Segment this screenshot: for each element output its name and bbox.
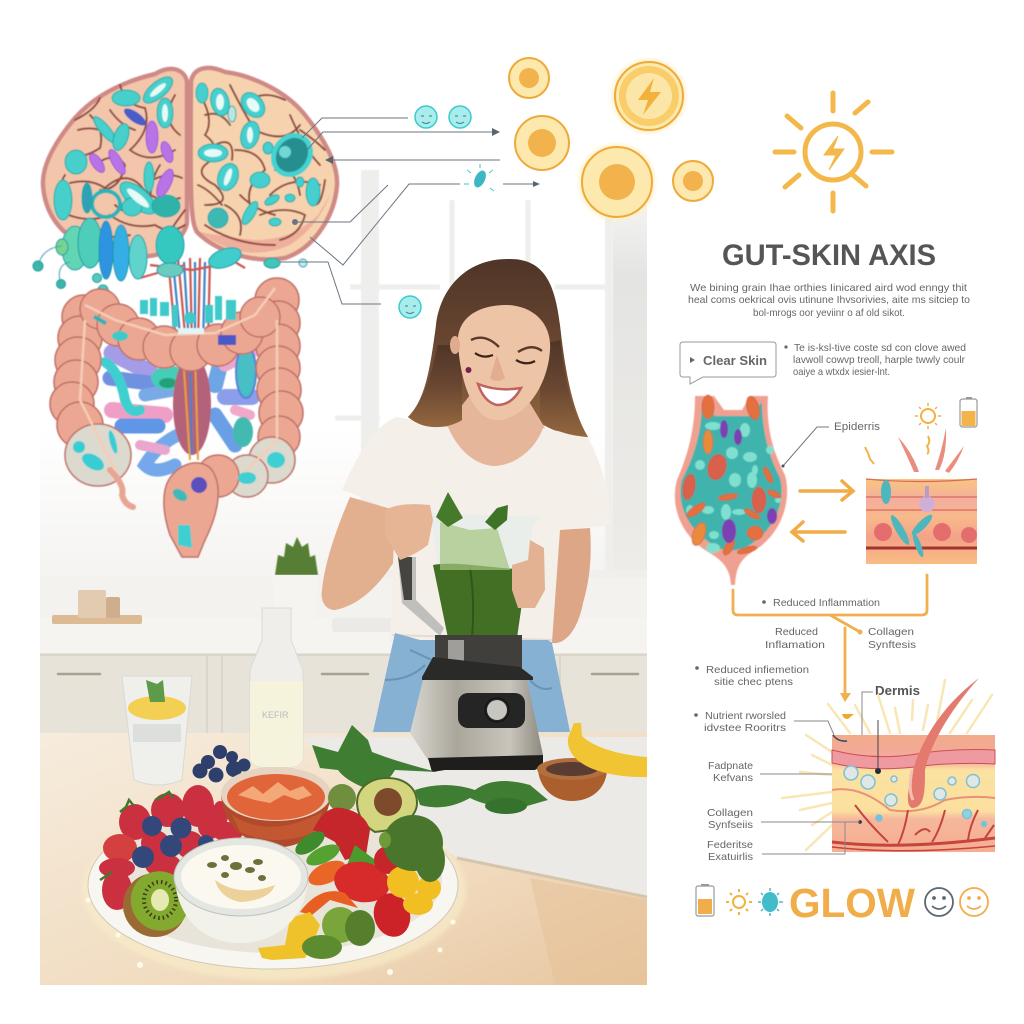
brain with microbes [33, 68, 337, 345]
exchange arrows [792, 481, 853, 541]
caecum microbes [73, 430, 119, 474]
bottom battery icon [696, 884, 714, 916]
left side bullets: sitie chec ptens [714, 676, 793, 688]
small broccoli behind [328, 784, 356, 812]
energy coins [509, 58, 713, 220]
dermis heading: Dermis [875, 684, 920, 698]
left side bullets: Exatuirlis [708, 851, 753, 863]
orange connector [733, 575, 927, 695]
wooden bowl of seeds [537, 758, 607, 801]
blueberries [132, 816, 214, 868]
left side bullets: Federitse [707, 839, 753, 851]
callout description: lavwoll cowvp treoll, harple twwly coulr [793, 354, 965, 366]
yogurt bowl [174, 838, 308, 943]
large sun icon [775, 93, 892, 211]
blender jug [430, 513, 540, 637]
arrowheads [325, 128, 568, 187]
small intestines [105, 350, 255, 470]
neck [445, 395, 545, 480]
lightning bolt [638, 78, 661, 115]
shirt [342, 417, 612, 642]
yellow tomatoes [387, 866, 441, 915]
reduced inflammation labels: Collagen [868, 626, 914, 638]
epiderris label [782, 421, 881, 468]
microbes right [196, 83, 320, 228]
glowing rays around skin [782, 680, 992, 850]
left side bullets: idvstee Rooritrs [704, 722, 786, 734]
left side bullets: Synfseiis [708, 819, 753, 831]
milk bottle kefir: KEFIR [262, 710, 289, 720]
kiwi [120, 861, 200, 941]
reduced inflammation labels: Reduced Inflammation [773, 597, 880, 609]
callout description [784, 342, 966, 378]
spinach leaves [312, 725, 548, 814]
brain folds [58, 85, 325, 245]
plant [272, 537, 318, 620]
vessels [832, 805, 995, 851]
left side bullets: Nutrient rworsled [705, 710, 786, 722]
intro paragraph: heal coms oekrical ovis utinune Ihvsorivies, aite ms sitciep to [688, 294, 970, 306]
left side bullets: Collagen [707, 807, 753, 819]
kitchen photo background [40, 170, 647, 985]
hemisphere left [43, 69, 187, 256]
epiderris label: Epiderris [834, 421, 881, 433]
reduced inflammation labels: Reduced [775, 626, 818, 638]
microbe cluster [33, 218, 307, 295]
broccoli [302, 815, 445, 959]
hair locks [408, 345, 462, 427]
table top [40, 733, 647, 985]
jeans [373, 633, 570, 732]
smiley grey [925, 888, 953, 916]
ascending colon [50, 295, 131, 486]
hair back [408, 259, 588, 437]
banana [568, 723, 647, 777]
intro paragraph [688, 282, 970, 319]
clear skin callout [680, 342, 776, 384]
reduced inflammation labels [762, 597, 916, 651]
blender collar [435, 635, 522, 668]
backsplash and worktop [40, 578, 647, 620]
annotation lines [280, 118, 534, 304]
hands on jug [385, 504, 433, 560]
callout description: oaiye a wtxdx iesier-lnt. [793, 366, 890, 378]
plate [82, 800, 466, 980]
bell peppers [291, 808, 415, 941]
glow word: GLOW [789, 880, 915, 926]
dermis leader lines [760, 692, 878, 854]
hemisphere right [191, 68, 337, 259]
teal face microbes [399, 106, 494, 318]
intro paragraph: We bining grain Ihae orthies Iinicared aird wod enngy thit [690, 282, 967, 294]
milk bottle kefir [250, 608, 303, 767]
gut-brain vessels [140, 258, 245, 345]
sun rays and battery top [865, 397, 977, 473]
coin halo [579, 59, 686, 220]
eyes brows mouth [471, 338, 542, 352]
reduced inflammation labels: Synftesis [868, 639, 916, 651]
face [458, 305, 550, 420]
hair follicle [908, 678, 979, 808]
left side bullets: Reduced infiemetion [706, 664, 809, 676]
avocado [357, 778, 417, 832]
woman blending smoothie [322, 259, 612, 772]
yellow pepper strips [258, 912, 320, 960]
window [335, 170, 647, 584]
smiley orange [960, 888, 988, 916]
marble slab [300, 737, 647, 897]
large dark microbe [262, 125, 322, 185]
counter items [52, 615, 142, 624]
blueberries on counter [192, 745, 250, 782]
microbes left [54, 72, 180, 220]
glass of lemon water [122, 676, 192, 785]
transverse colon [80, 289, 280, 371]
intro paragraph: bol-mrogs oor yeviinr o af old sikot. [753, 307, 905, 319]
descending colon [164, 278, 303, 557]
skin cross-section dermis [832, 678, 995, 852]
sparkles [86, 898, 456, 975]
sigmoid rectum [164, 463, 218, 557]
arm right [522, 528, 591, 643]
kimchi bowl [221, 767, 331, 847]
left side bullets: Kefvans [713, 772, 753, 784]
bottom sun icon [726, 889, 752, 915]
bacteria [686, 422, 781, 553]
left side bullets [694, 664, 809, 863]
arm left [322, 497, 397, 610]
colon and intestines [50, 278, 303, 557]
reduced inflammation labels: Inflamation [765, 639, 825, 651]
callout description: Te is-ksl-tive coste sd con clove awed [794, 342, 966, 354]
skin cross-section top [866, 479, 977, 564]
clear skin callout: Clear Skin [703, 353, 767, 368]
left side bullets: Fadpnate [708, 760, 753, 772]
bottom microbe icon [758, 888, 783, 916]
title: GUT-SKIN AXIS [722, 239, 936, 272]
cells [844, 766, 986, 826]
blender base [422, 657, 533, 680]
strawberries [99, 785, 243, 910]
gut microbiome pouch [675, 395, 787, 585]
handle [398, 557, 444, 636]
colon microbes [93, 296, 236, 341]
plate of gut-friendly food [82, 767, 466, 980]
